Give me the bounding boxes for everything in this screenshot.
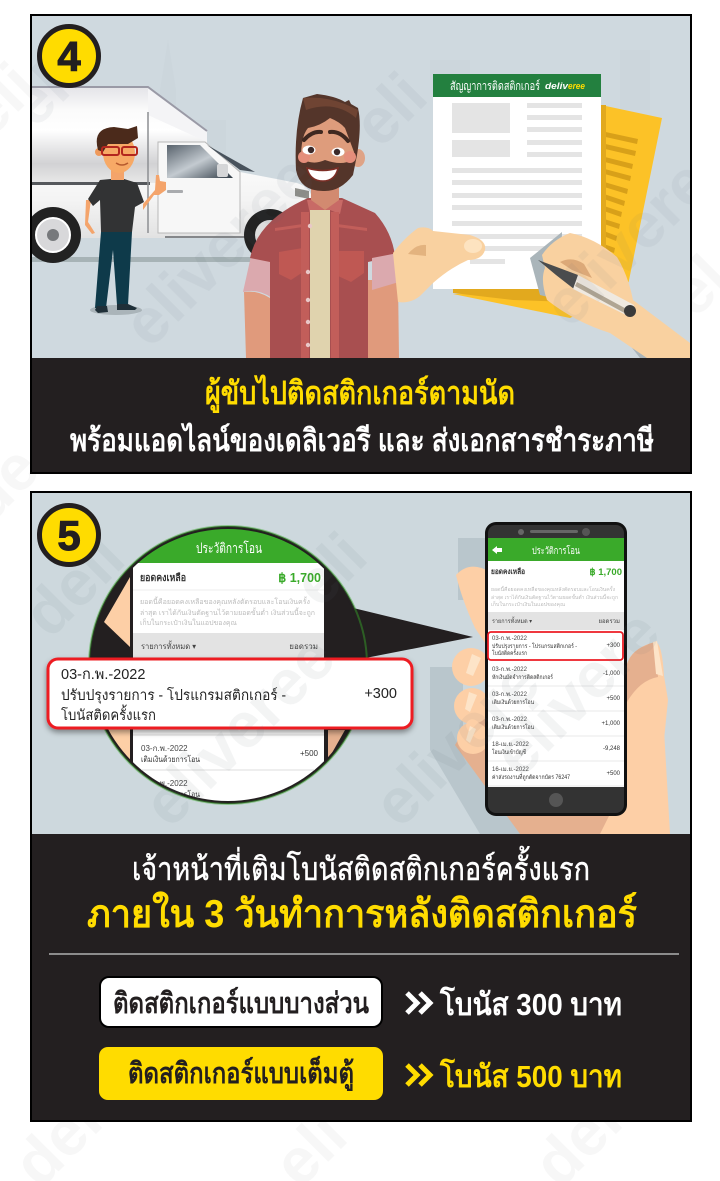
button: full truck sticker (99, 1047, 383, 1100)
heading: yellow: ผู้ขับไปติดสติกเกอร์ตามนัด (205, 374, 515, 414)
badge: number 5 (40, 506, 98, 564)
button: partial sticker: ติดสติกเกอร์แบบบางส่วน (113, 986, 369, 1020)
illustration: step 4 scene (32, 74, 690, 358)
icon: big bearded man (243, 94, 399, 358)
badge: number 4: 4 (57, 33, 81, 80)
watermark on scene: deli (9, 521, 138, 650)
icon: phone: ยอดคงเหลือ (491, 567, 525, 576)
icon: left hand with thumb (393, 227, 485, 302)
icon: phone: ค่าส่งรถงานที่ถูกตัดจากบัตร 76247 (492, 773, 571, 781)
icon: phone: 16-เม.ย.-2022 (492, 767, 530, 773)
arrow: white chevrons (407, 993, 430, 1013)
callout: highlighted transaction (48, 659, 412, 728)
panel: step 5 (9, 491, 692, 1122)
icon: phone: +500 (606, 696, 621, 702)
magnifier circle: ยอดคงเหลือ (140, 572, 186, 584)
watermark on scene: eli (339, 59, 440, 160)
icon: phone: ฿ 1,700 (590, 567, 622, 578)
watermark on scene (32, 88, 643, 320)
panel: step 4 (0, 14, 720, 474)
callout: highlighted transaction: โบนัสติดครั้งแรก (61, 704, 156, 724)
watermark on scene: eliveree (129, 620, 349, 840)
heading: yellow: ภายใน 3 วันทำการหลังติดสติกเกอร์ (87, 891, 637, 936)
badge: number 4 (40, 26, 98, 86)
magnifier circle: ยอดนี้คือยอดคงเหลือของคุณหลังตัดรอบและโอนเงินครั้ง (140, 595, 310, 606)
magnifier circle: เก็บในกระเป๋าเงินในแอปของคุณ (140, 618, 238, 627)
heading: white: เจ้าหน้าที่เติมโบนัสติดสติกเกอร์ครั้งแรก (132, 846, 590, 887)
caption bar: step 5 (32, 834, 690, 1120)
icon: phone: ล่าสุด เราได้กันเงินตัดฐานไว้ตามยอดขั้นต่ำ เงินส่วนนี้จะถูก (491, 592, 618, 601)
icon: phone: +500 (606, 771, 621, 777)
contract document: สัญญาการติดสติกเกอร์ (450, 79, 540, 93)
magnifier circle: 03-ก.พ.-2022 (141, 779, 188, 788)
hand shadow (430, 538, 520, 834)
icon: phone: เติมเงินด้วยการโอน (492, 698, 534, 706)
watermark on scene: elivere (479, 596, 673, 790)
icon: phone (485, 522, 627, 816)
magnifier circle: ประวัติการโอน (196, 540, 262, 556)
badge: number 5: 5 (57, 512, 81, 559)
icon: phone: 18-เม.ย.-2022 (492, 742, 530, 748)
button: partial sticker (100, 977, 382, 1027)
button: full truck sticker: ติดสติกเกอร์แบบเต็มตู้ (128, 1055, 354, 1091)
icon: phone: ปรับปรุงรายการ - โปรแกรมสติกเกอร์ - (492, 642, 577, 650)
magnifier circle: รายการทั้งหมด ▾ (141, 640, 196, 651)
ground shadow (32, 257, 250, 262)
icon: phone: โอนเงินเข้าบัญชี (492, 748, 526, 756)
watermark on scene: elivere (529, 146, 720, 340)
icon: phone: หักเงินมัดจำการติดสติกเกอร์ (492, 673, 554, 681)
watermark on scene (34, 530, 656, 822)
magnifier circle: ล่าสุด เราได้กันเงินตัดฐานไว้ตามยอดขั้นต่ำ เงินส่วนนี้จะถูก (140, 606, 315, 617)
contract document: deliv (545, 81, 569, 92)
magnifier circle: ยอดรวม (289, 642, 318, 651)
icon: paper stripes (606, 132, 638, 253)
watermark on scene: eli (279, 519, 380, 620)
text: bonus 500: โบนัส 500 บาท (439, 1058, 622, 1094)
icon: phone: 03-ก.พ.-2022 (492, 666, 528, 673)
contract document (433, 74, 601, 289)
callout pointer (354, 608, 473, 658)
icon: phone: ยอดนี้คือยอดคงเหลือของคุณหลังตัดรอบและโอนเงินครั้ง (491, 584, 616, 593)
icon: phone: 03-ก.พ.-2022 (492, 716, 528, 723)
watermark on scene: eliveree (109, 140, 329, 360)
magnifier circle: ฿ 1,700 (278, 571, 321, 585)
icon: phone: +300 (606, 643, 621, 649)
icon: white pickup truck (25, 87, 312, 263)
callout: highlighted transaction: 03-ก.พ.-2022 (61, 667, 145, 683)
icon: phone: เก็บในกระเป๋าเงินในแอปของคุณ (491, 600, 565, 608)
callout: highlighted transaction: +300 (364, 686, 397, 702)
icon: phone: ประวัติการโอน (532, 544, 580, 557)
illustration: step 5 scene (9, 519, 673, 840)
caption bar: step 4 (32, 358, 690, 472)
icon: phone: โบนัสติดครั้งแรก (492, 647, 527, 657)
icon: phone: รายการทั้งหมด ▾ (492, 615, 532, 625)
icon: phone: 03-ก.พ.-2022 (492, 635, 528, 642)
arrow: yellow chevrons (407, 1065, 430, 1085)
text: bonus 300: โบนัส 300 บาท (439, 986, 622, 1022)
callout: highlighted transaction: ปรับปรุงรายการ - โปรแกรมสติกเกอร์ - (61, 686, 286, 704)
icon: yellow paper (453, 105, 662, 318)
icon: phone: -1,000 (603, 671, 621, 677)
magnifier circle: เติมเงินด้วยการโอน (141, 754, 200, 764)
icon: contract shadow (453, 105, 606, 302)
magnifier circle: เติมเงินด้วยการโอน (141, 789, 200, 799)
icon: phone: +1,000 (601, 721, 621, 727)
magnifier circle: 03-ก.พ.-2022 (141, 744, 188, 753)
contract document: eree (568, 81, 586, 92)
icon: hand holding phone (452, 567, 670, 834)
icon: phone: -9,248 (603, 746, 621, 752)
icon: right hand with pen (530, 232, 690, 358)
magnifier circle: +500 (300, 749, 319, 758)
magnifier circle (88, 525, 368, 805)
watermark on scene: elivere (359, 646, 553, 840)
icon: phone: เติมเงินด้วยการโอน (492, 723, 534, 731)
icon: phone: ยอดรวม (598, 618, 620, 625)
icon: small man with glasses (85, 126, 166, 315)
icon: phone: 03-ก.พ.-2022 (492, 691, 528, 698)
background skyline (140, 40, 650, 180)
